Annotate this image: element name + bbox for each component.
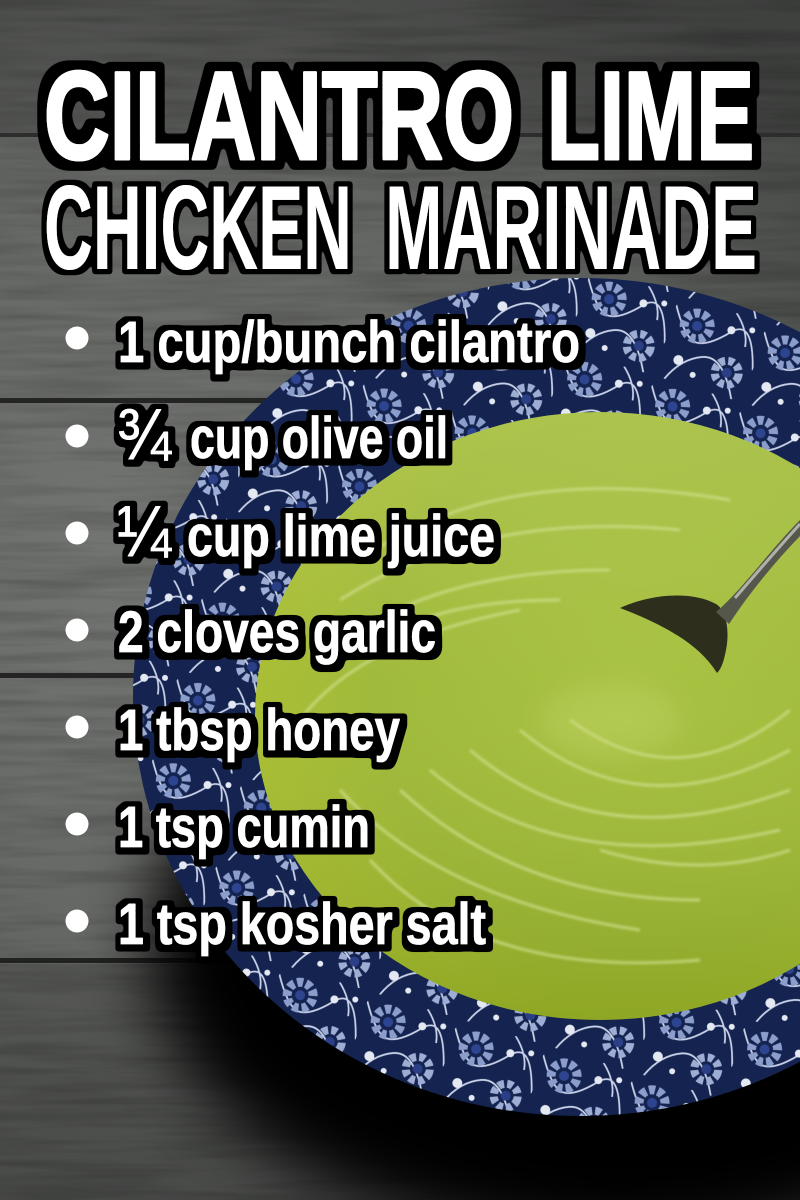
bowl rim — [133, 278, 800, 1116]
sauce highlight — [540, 684, 680, 756]
bullet 1 — [66, 326, 88, 350]
title line 2: CHICKEN — [44, 161, 352, 295]
item: olive oil: cup olive oil — [190, 406, 448, 471]
title line 1: CILANTRO — [44, 47, 514, 186]
bullet 6 — [66, 812, 88, 836]
bullet 4 — [66, 618, 88, 642]
sauce — [255, 412, 800, 1020]
sauce swirls — [300, 489, 790, 963]
item: lime juice: cup lime juice — [187, 504, 495, 569]
title — [44, 47, 757, 295]
bullet 3 — [66, 522, 88, 544]
ingredient list — [66, 310, 580, 957]
bullet 7 — [66, 910, 88, 932]
bowl shadow — [150, 645, 800, 1200]
item: olive oil — [117, 395, 448, 475]
item: olive oil: ¾ — [117, 395, 172, 475]
item: garlic: 2 cloves garlic — [118, 600, 436, 665]
bullet 5 — [66, 716, 88, 738]
item: cilantro: 1 cup/bunch cilantro — [118, 310, 580, 375]
bullet 2 — [66, 424, 88, 448]
spoon — [620, 520, 800, 673]
item: lime juice — [117, 492, 495, 572]
item: honey: 1 tbsp honey — [118, 698, 400, 763]
item: cumin: 1 tsp cumin — [118, 795, 370, 860]
item: lime juice: ¼ — [117, 492, 172, 572]
bowl — [133, 278, 800, 1116]
item: kosher salt: 1 tsp kosher salt — [118, 892, 486, 957]
